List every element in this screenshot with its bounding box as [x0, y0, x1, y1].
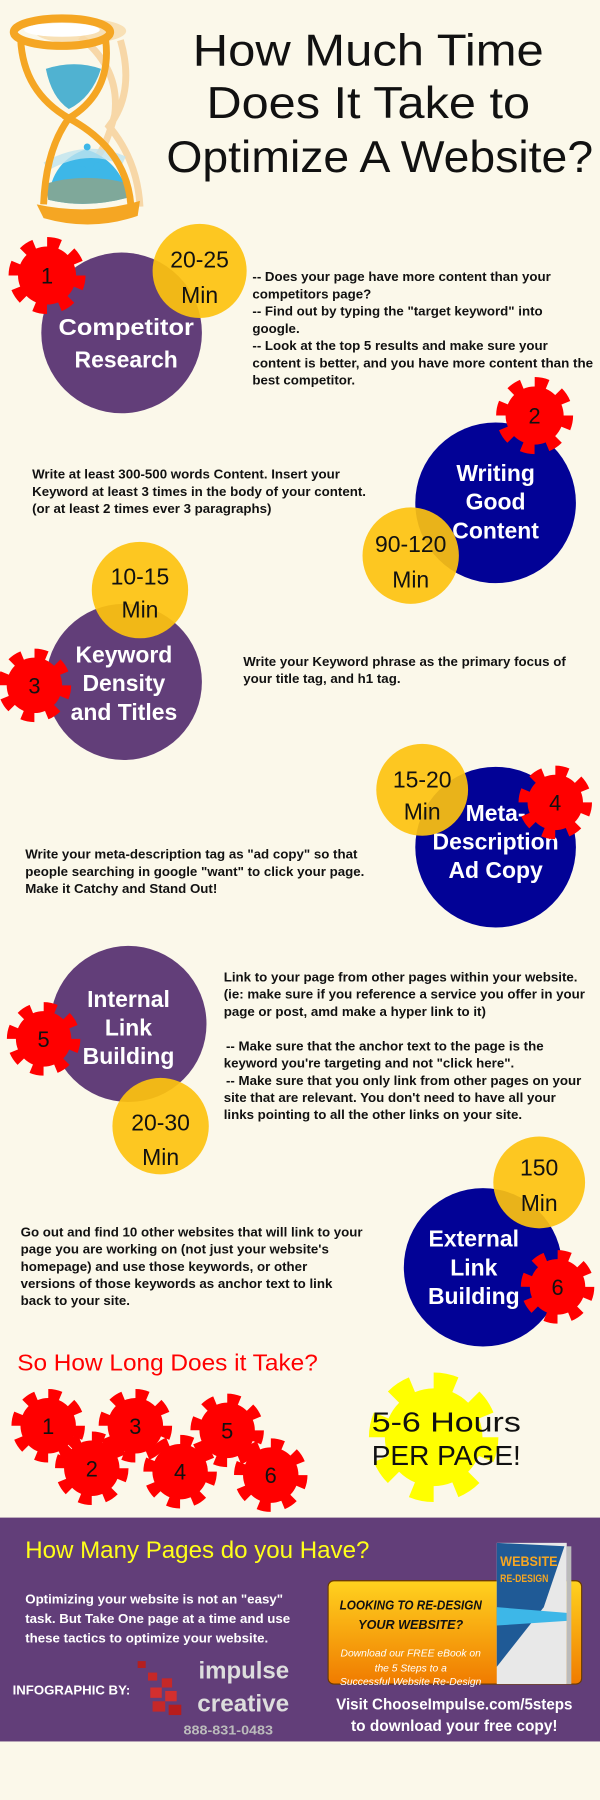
gear 5: 5 — [38, 1027, 50, 1052]
panel: step 6 external link building — [21, 1136, 589, 1347]
text: visit chooseimpulse: to download your free copy! — [351, 1717, 558, 1735]
circle: writing good content: Good — [466, 489, 526, 515]
gear 5 — [12, 1008, 75, 1070]
title: Optimize A Website? — [166, 132, 593, 182]
text: step 6: Go out and find 10 other websites that will link to your — [21, 1224, 363, 1239]
text: step 2: Keyword at least 3 times in the body of your content. — [32, 484, 366, 499]
text: step 1: -- Find out by typing the "target keyword" into — [252, 304, 543, 319]
text: optimizing your website: Optimizing your website is not an "easy" — [25, 1592, 283, 1607]
callout: 5-6 hours per page: 5-6 Hours — [372, 1406, 521, 1438]
callout: ebook download box: the 5 Steps to a — [375, 1663, 447, 1674]
circle: meta-description ad copy: Meta- — [466, 800, 526, 826]
text: step 1: content is better, and you have more content than the — [252, 355, 593, 370]
circle: internal link building: Internal — [87, 986, 170, 1012]
text: step 2: (or at least 2 times ever 3 paragraphs) — [32, 501, 271, 516]
gear 3: 3 — [28, 673, 40, 698]
panel: step 1 competitor research — [14, 224, 593, 413]
text: step 5: -- Make sure that the anchor text to the page is the — [226, 1038, 544, 1053]
circle: keyword density and titles: and Titles — [71, 699, 177, 725]
badge: 20-30 min: 20-30 — [131, 1110, 190, 1136]
badge: 20-30 min — [112, 1078, 209, 1174]
badge: 15-20 min: 15-20 — [393, 766, 452, 793]
text: step 3: your title tag, and h1 tag. — [243, 671, 401, 686]
text: step 1: google. — [252, 321, 300, 336]
circle: external link building — [404, 1188, 562, 1347]
text: optimizing your website: these tactics to optimize your website. — [25, 1631, 268, 1646]
gear 6: 6 — [551, 1275, 564, 1300]
circle: competitor research: Competitor — [59, 314, 194, 340]
logo: impulse creative: impulse — [198, 1657, 289, 1684]
panel: step 2 writing good content — [32, 383, 576, 604]
circle: external link building: Building — [428, 1283, 520, 1309]
text: optimizing your website — [25, 1592, 290, 1646]
text: step 1: -- Look at the top 5 results and make sure your — [252, 338, 548, 353]
text: step 3: Write your Keyword phrase as the primary focus of — [243, 654, 566, 669]
circle: meta-description ad copy — [415, 767, 576, 928]
text: step 5: site that are relevant. You don't need to have all your — [224, 1090, 556, 1105]
gears row 1-6 — [17, 1394, 302, 1506]
text: step 2: Write at least 300-500 words Content. Insert your — [32, 467, 340, 482]
logo: impulse creative — [138, 1657, 289, 1738]
text: optimizing your website: task. But Take One page at a time and use — [25, 1611, 290, 1626]
badge: 90-120 min: 90-120 — [375, 531, 446, 557]
callout: 5-6 hours per page: PER PAGE! — [372, 1440, 521, 1471]
gears row 1-6: 6 — [265, 1463, 277, 1488]
badge: 150 min: 150 — [520, 1155, 558, 1181]
gears row 1-6: 5 — [221, 1418, 233, 1443]
text: step 6: page you are working on (not just your website's — [21, 1242, 329, 1257]
text: step 6 — [21, 1224, 363, 1308]
badge: 90-120 min — [363, 507, 459, 604]
text: step 6: homepage) and use those keywords, or other — [21, 1259, 307, 1274]
text: step 1: best competitor. — [252, 373, 355, 388]
gear 3 — [3, 654, 66, 717]
gear 1: 1 — [41, 264, 53, 289]
icon: ebook cover: WEBSITE — [500, 1554, 558, 1569]
panel: footer band — [0, 1518, 600, 1741]
text: step 6: versions of those keywords as anchor text to link — [21, 1276, 333, 1291]
gear 1 — [14, 243, 80, 308]
gear 4 — [524, 771, 587, 834]
callout: ebook download box: LOOKING TO RE-DESIGN — [340, 1598, 483, 1612]
badge: 10-15 min — [92, 542, 188, 638]
text: step 5: -- Make sure that you only link from other pages on your — [226, 1073, 581, 1088]
icon: ebook cover — [497, 1543, 571, 1684]
callout: ebook download box: Download our FREE eBook on — [341, 1649, 481, 1660]
text: step 1: -- Does your page have more content than your — [252, 269, 551, 284]
badge: 150 min: Min — [521, 1190, 558, 1216]
badge: 20-30 min: Min — [142, 1144, 179, 1170]
text: step 4: people searching in google "want" to click your page. — [25, 864, 364, 879]
badge: 10-15 min: Min — [121, 597, 158, 623]
text: step 5: (ie: make sure if you reference a service you offer in your — [224, 987, 585, 1002]
badge: 20-25 min: Min — [181, 282, 218, 308]
title: How Much Time — [193, 25, 544, 75]
text: step 5 — [224, 970, 585, 1122]
text: step 6: back to your site. — [21, 1293, 130, 1308]
circle: external link building: External — [429, 1226, 519, 1252]
callout: 5-6 hours per page — [372, 1382, 521, 1492]
gear 4: 4 — [549, 790, 561, 815]
text: step 4: Write your meta-description tag as "ad copy" so that — [25, 847, 358, 862]
label: infographic by: INFOGRAPHIC BY: — [13, 1682, 130, 1697]
gears row 1-6: 2 — [86, 1456, 98, 1481]
text: step 5: Link to your page from other pages within your website. — [224, 970, 577, 985]
circle: writing good content — [415, 422, 576, 583]
gears row 1-6: 3 — [129, 1414, 141, 1439]
title: Does It Take to — [207, 78, 530, 128]
logo: impulse creative: 888-831-0483 — [184, 1724, 273, 1738]
badge: 90-120 min: Min — [392, 567, 429, 593]
text: step 4 — [25, 847, 364, 896]
badge: 20-25 min: 20-25 — [170, 246, 229, 272]
panel: step 4 meta description — [25, 744, 587, 928]
circle: writing good content: Content — [452, 517, 539, 543]
text: step 5: links pointing to all the other links on your site. — [224, 1107, 522, 1122]
text: step 4: Make it Catchy and Stand Out! — [25, 881, 217, 896]
callout: ebook download box — [328, 1581, 582, 1688]
callout: ebook download box: YOUR WEBSITE? — [358, 1618, 464, 1632]
circle: writing good content: Writing — [456, 460, 535, 486]
panel: step 3 keyword density — [3, 542, 566, 760]
gear 2: 2 — [529, 404, 541, 429]
icon: ebook cover: RE-DESIGN — [500, 1573, 548, 1585]
circle: keyword density and titles — [46, 604, 202, 760]
gear 6 — [526, 1256, 589, 1318]
callout: ebook download box: Successful Website Re-Design — [340, 1677, 482, 1688]
heading: so how long does it take: So How Long Does it Take? — [17, 1350, 318, 1376]
text: step 2 — [32, 467, 366, 516]
gears row 1-6: 1 — [42, 1414, 54, 1439]
text: step 1: competitors page? — [252, 286, 371, 301]
logo: impulse creative: creative — [197, 1691, 289, 1718]
circle: keyword density and titles: Density — [82, 670, 166, 696]
panel: step 5 internal link building — [12, 946, 585, 1174]
badge: 10-15 min: 10-15 — [111, 563, 169, 589]
text: visit chooseimpulse — [336, 1695, 573, 1735]
badge: 150 min — [493, 1136, 585, 1228]
text: visit chooseimpulse: Visit ChooseImpulse.com/5steps — [336, 1695, 573, 1713]
text: step 5: keyword you're targeting and not "click here". — [224, 1056, 514, 1071]
text: step 3 — [243, 654, 566, 686]
icon: hourglass — [14, 18, 140, 224]
text: step 5: page or post, amd make a hyper link to it) — [224, 1004, 486, 1019]
circle: internal link building — [50, 946, 207, 1102]
circle: internal link building: Building — [83, 1043, 174, 1069]
circle: external link building: Link — [450, 1254, 498, 1280]
title — [166, 25, 593, 182]
heading: how many pages: How Many Pages do you Have? — [25, 1537, 369, 1564]
circle: keyword density and titles: Keyword — [75, 641, 172, 667]
gears row 1-6: 4 — [174, 1460, 186, 1485]
circle: meta-description ad copy: Description — [433, 828, 559, 854]
text: step 1 — [252, 269, 593, 388]
badge: 20-25 min — [153, 224, 247, 318]
gear 2 — [502, 383, 567, 448]
circle: meta-description ad copy: Ad Copy — [448, 857, 543, 883]
badge: 15-20 min — [376, 744, 468, 836]
circle: internal link building: Link — [105, 1014, 152, 1040]
circle: competitor research — [41, 253, 202, 413]
circle: competitor research: Research — [75, 346, 178, 372]
badge: 15-20 min: Min — [404, 799, 441, 825]
